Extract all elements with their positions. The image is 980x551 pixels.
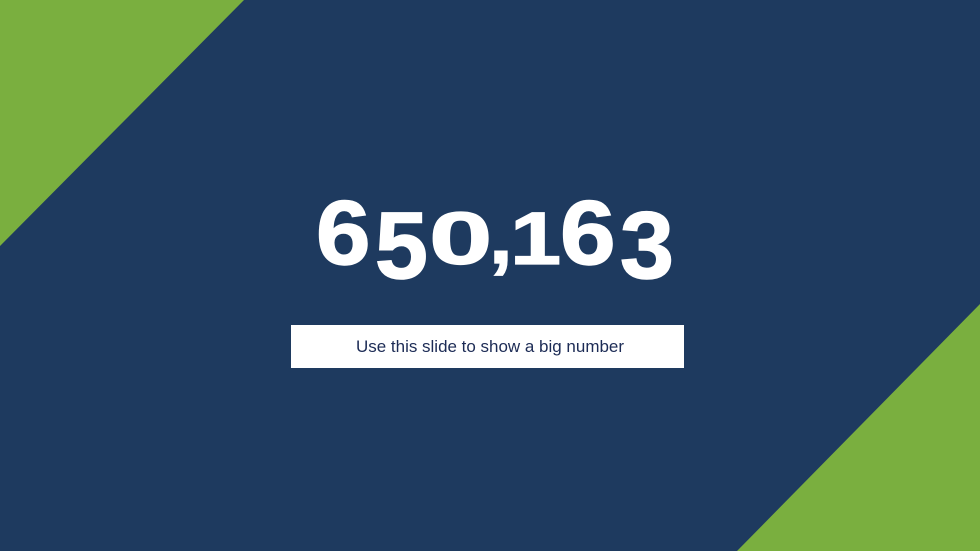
green triangle: bottom right (737, 304, 980, 551)
caption box (291, 325, 684, 368)
big number: 0 (429, 198, 492, 280)
green triangle: top left (0, 0, 244, 246)
big number: 1 (510, 197, 561, 280)
big number: , (489, 191, 513, 280)
caption text: Use this slide to show a big number (356, 337, 624, 356)
big number: 5 (375, 193, 428, 299)
big number: 6 (560, 182, 616, 284)
big number: 3 (620, 193, 674, 299)
big number (316, 182, 674, 299)
big number: 6 (316, 182, 371, 284)
